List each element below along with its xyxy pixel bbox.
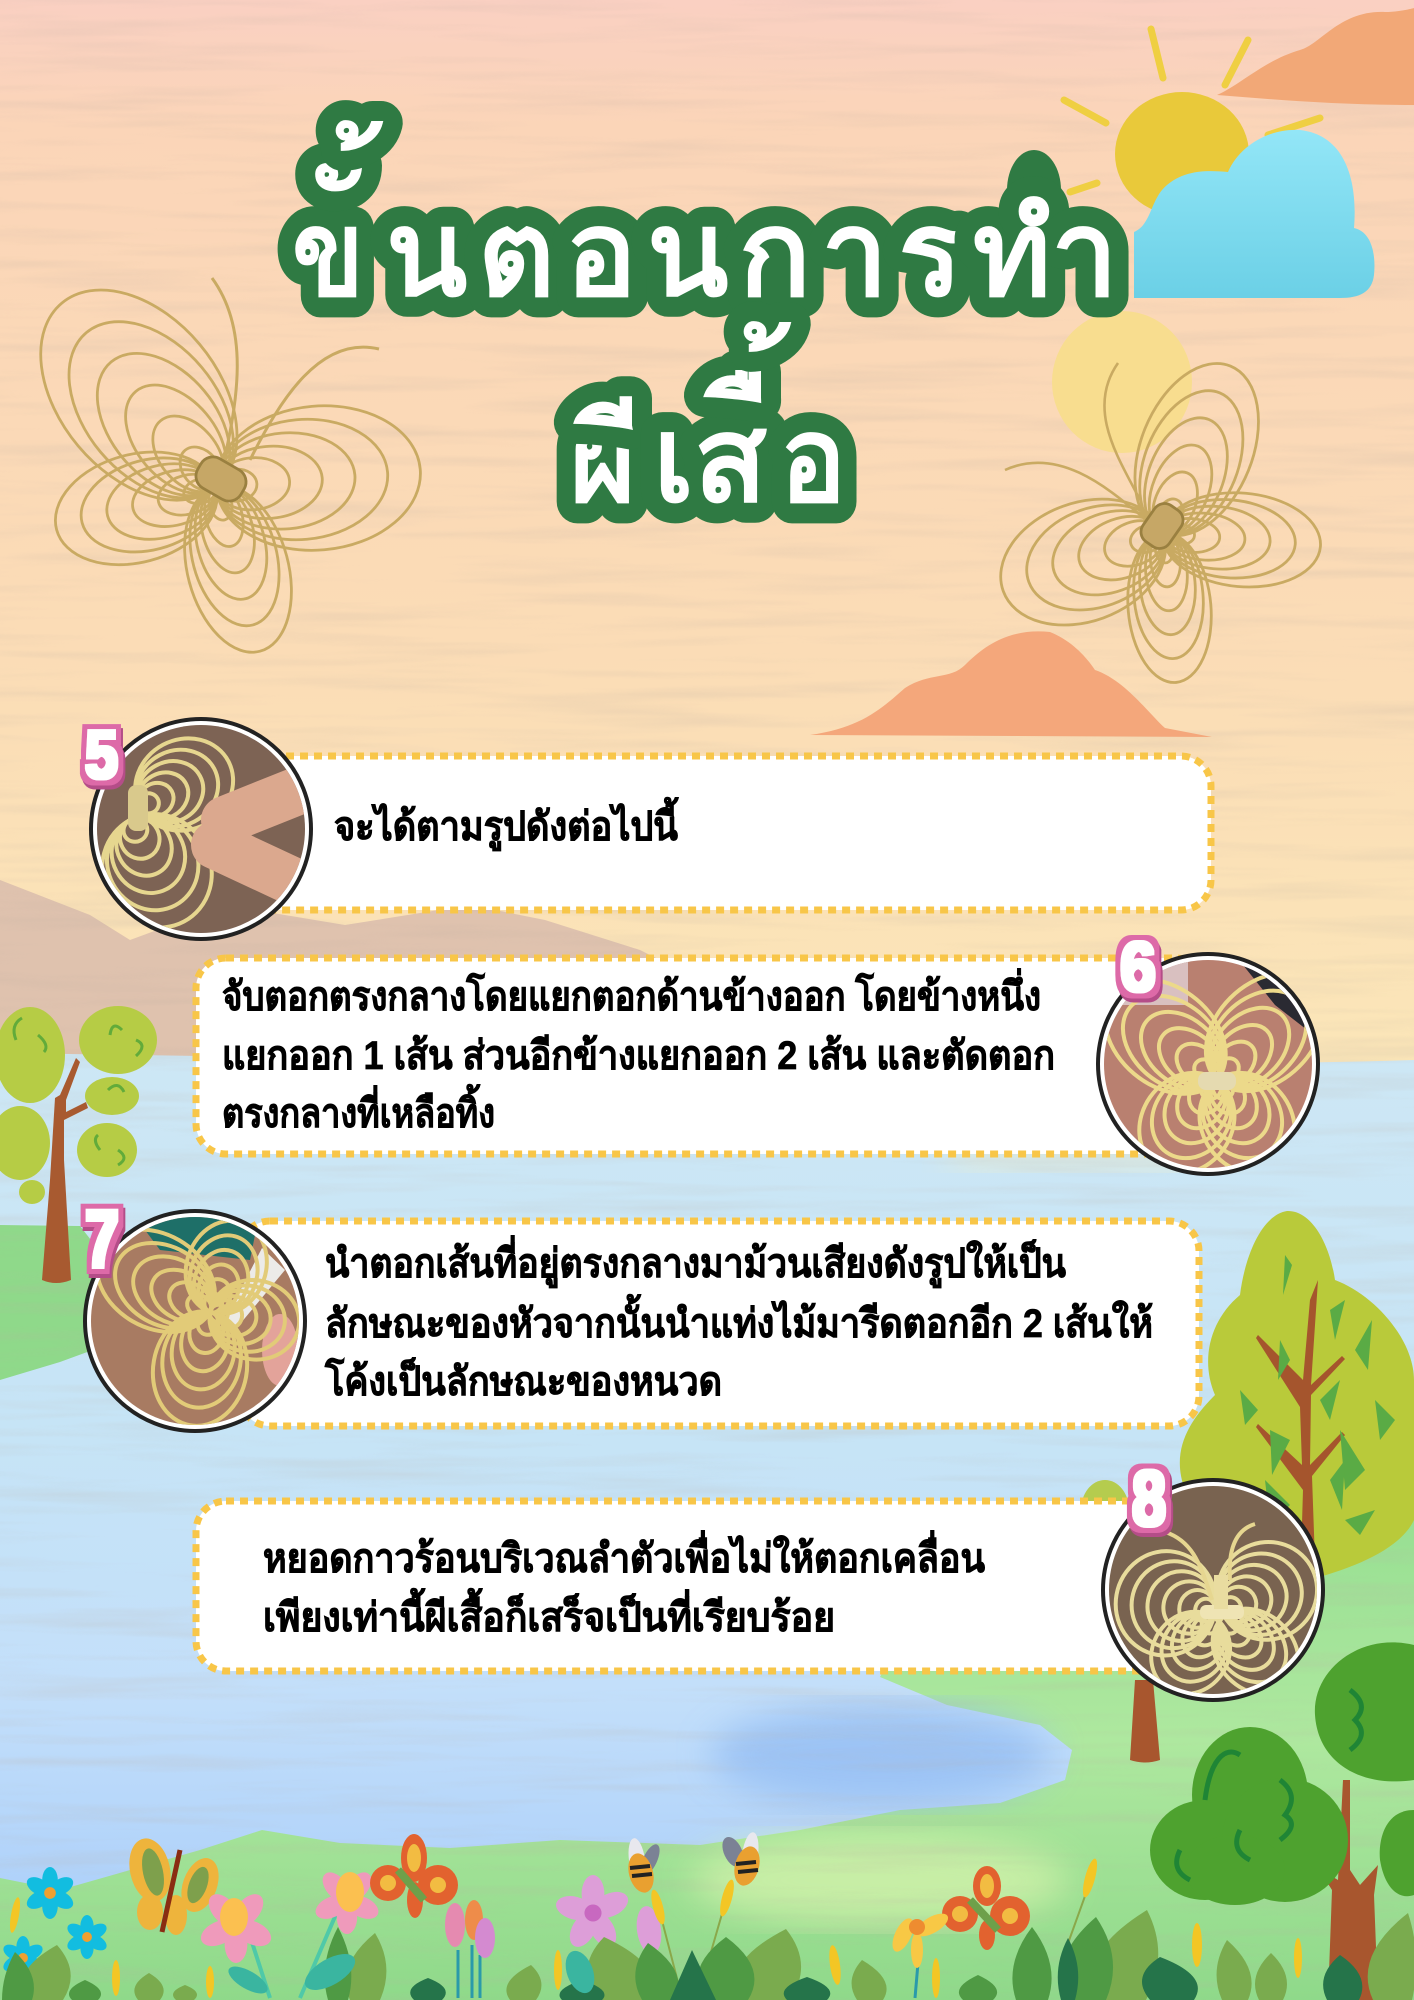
bottom decoration: foreground leaves — [2, 1910, 1414, 2000]
step 5 photo — [82, 719, 312, 947]
icon: blue cloud — [1134, 130, 1374, 298]
title line 2: ้ — [743, 321, 792, 475]
icon: orange cloud top right — [1217, 8, 1414, 105]
right big tree — [1180, 1211, 1414, 1590]
icon: pale yellow swirl sun — [1052, 311, 1192, 453]
step 6 text: จับตอกตรงกลางโดยแยกตอกด้านข้างออก โดยข้างหนึ่ง — [222, 968, 1041, 1019]
step 7 text: โค้งเป็นลักษณะของหนวด — [324, 1356, 722, 1404]
icon: purple flowers — [553, 1875, 664, 1955]
step 8 text — [263, 1530, 985, 1640]
background: pale reflection band — [950, 1140, 1230, 1170]
icon: tulips — [445, 1900, 495, 1998]
title line 1: นตอนการทำ — [386, 188, 1118, 321]
icon: yellow butterfly — [124, 1835, 226, 1935]
step 7 text: นำตอกเส้นที่อยู่ตรงกลางมาม้วนเสียงดังรูปให้เป็น — [325, 1235, 1066, 1288]
title line 1: ้ — [335, 120, 384, 274]
icon: bee right — [718, 1831, 764, 1888]
title line 2: เส — [653, 394, 767, 527]
step 7 photo — [78, 1209, 307, 1433]
icon: yellow flower — [888, 1909, 952, 1998]
title line 1: ั — [315, 153, 362, 286]
icon: orange cloud lower — [810, 631, 1212, 737]
icon: sun — [1064, 29, 1320, 216]
step 7 text — [324, 1235, 1153, 1404]
small tree behind step 8 — [1081, 1480, 1160, 1762]
title line 2 — [570, 321, 846, 527]
bottom decoration: flowers and butterflies — [1, 1831, 1302, 1998]
icon: blue flowers — [1, 1867, 109, 1980]
step 8 number: 8 — [1132, 1454, 1166, 1542]
decorative bamboo butterfly right — [983, 345, 1324, 686]
step 8 photo — [1100, 1480, 1333, 1712]
background: distant mountains — [0, 880, 690, 1070]
step 6 card — [196, 958, 1206, 1154]
step 8 panel — [196, 1454, 1333, 1712]
icon: bee left — [624, 1837, 664, 1895]
step 5 text: จะได้ตามรูปดังต่อไปนี้ — [334, 797, 679, 851]
icon: orange butterfly right — [942, 1866, 1030, 1950]
step 8 text: เพียงเท่านี้ผีเสื้อก็เสร็จเป็นที่เรียบร้อย — [263, 1588, 835, 1640]
step 8 text: หยอดกาวร้อนบริเวณลำตัวเพื่อไม่ให้ตอกเคลื่อน — [263, 1530, 985, 1581]
icon: pink flowers — [197, 1867, 382, 1998]
step 5 card — [200, 756, 1211, 910]
step 6 number: 6 — [1120, 928, 1156, 1006]
title line 2: ี — [573, 392, 641, 525]
bottom right trees — [1150, 1642, 1414, 2000]
step 5 number: 5 — [85, 717, 118, 793]
step 6 photo — [1096, 952, 1320, 1176]
step 6 text — [222, 968, 1055, 1136]
background: right bank and meadow — [0, 1480, 1414, 2000]
step 7 number: 7 — [85, 1194, 119, 1285]
icon: orange butterfly left — [370, 1834, 458, 1918]
step 7 panel — [78, 1194, 1199, 1433]
step 8 card — [196, 1501, 1206, 1671]
step 6 panel — [192, 935, 1320, 1176]
step 6 text: แยกออก 1 เส้น ส่วนอีกข้างแยกออก 2 เส้น และตัดตอก — [222, 1034, 1055, 1078]
step 5 panel — [82, 717, 1211, 947]
background: light meadow patch — [690, 1835, 1070, 1925]
title line 1 — [292, 120, 1118, 321]
step 7 card — [240, 1221, 1199, 1426]
background: water — [0, 1052, 1414, 1900]
background: deeper water patch — [710, 1705, 1050, 1805]
step 6 text: ตรงกลางที่เหลือทิ้ง — [222, 1084, 495, 1136]
background: left bank — [0, 1225, 130, 1380]
decorative bamboo butterfly left — [1, 252, 426, 664]
left tree — [0, 1006, 157, 1283]
title line 1: ข — [292, 188, 364, 321]
title line 2: อ — [780, 394, 846, 527]
icon: yellow stalks — [8, 1857, 1302, 1998]
background: painted sky — [0, 0, 1414, 1070]
title line 2: ผ — [570, 394, 636, 527]
step 7 text: ลักษณะของหัวจากนั้นนำแท่งไม้มารีดตอกอีก 2 เส้นให้ — [325, 1294, 1153, 1346]
title — [292, 120, 1118, 527]
title line 2: ื — [703, 365, 770, 498]
